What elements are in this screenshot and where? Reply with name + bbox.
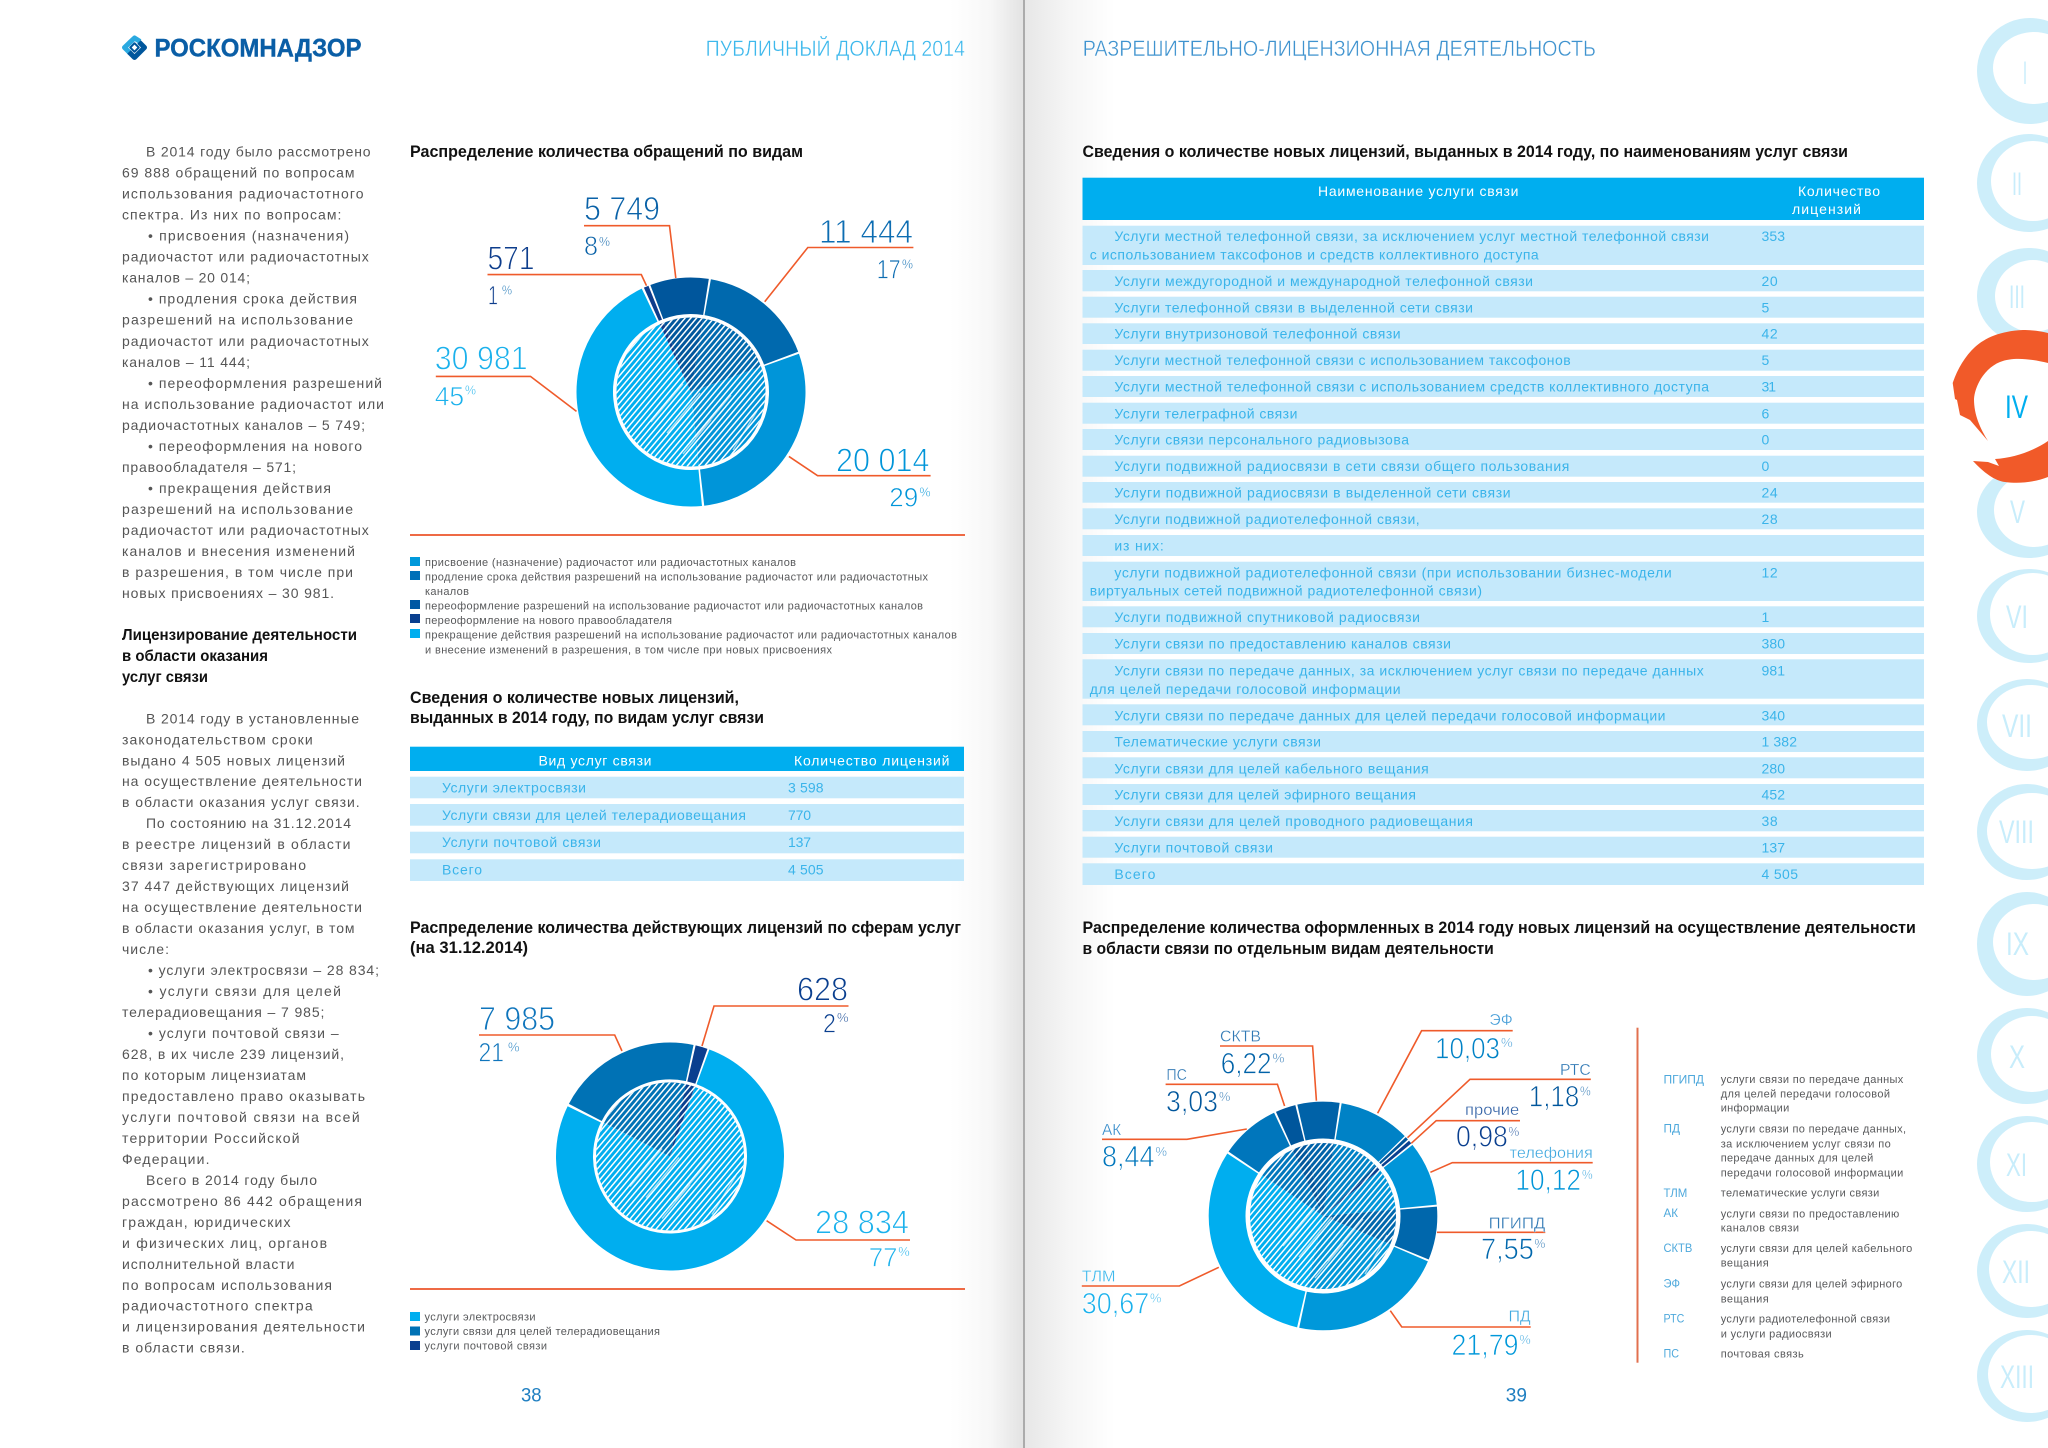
- table: new licences by service name: виртуальных сетей подвижной радиотелефонной связи): [1090, 583, 1482, 599]
- text block: left column, licensing: радиочастотного спектра: [122, 1298, 313, 1314]
- table: new licences by service name: Услуги связи персонального радиовызова: [1114, 432, 1409, 448]
- callout: АК: АК: [1102, 1122, 1122, 1139]
- table: new licences by service name: Всего: [1114, 866, 1156, 882]
- table: new licences by type of service: 4 505: [788, 862, 824, 878]
- callout: 11 444: 11 444: [819, 213, 913, 250]
- table: new licences by type of service: 137: [788, 834, 811, 850]
- text block: left column, licensing: 37 447 действующих лицензий: [122, 878, 349, 894]
- text block: left column, radio frequency requests: новых присвоениях – 30 981.: [122, 585, 334, 601]
- table: new licences by service name: Услуги телефонной связи в выделенной сети связи: [1114, 299, 1473, 315]
- callout: прочие: прочие: [1465, 1102, 1519, 1119]
- callout: 11 444: 17: [877, 255, 901, 285]
- table: new licences by service name: Телематические услуги связи: [1114, 734, 1321, 750]
- table: new licences by service name: 452: [1762, 787, 1785, 803]
- table: new licences by service name: Услуги связи для целей проводного радиовещания: [1114, 813, 1473, 829]
- text block: left column, licensing: в области оказания услуг, в том: [122, 920, 354, 936]
- callout: 571: 1: [488, 281, 498, 311]
- legend: abbreviations glossary: [1664, 1072, 1912, 1360]
- callout: 20 014: [789, 441, 931, 512]
- heading: active licences by sphere: Распределение количества действующих лицензий по сферам услуг: [410, 919, 961, 937]
- text block: left column, radio frequency requests: использования радиочастотного: [122, 186, 364, 202]
- callout: прочие: [1411, 1102, 1520, 1154]
- legend: abbreviations glossary: ПГИПД: [1664, 1072, 1704, 1086]
- table: new licences by type of service: Услуги связи для целей телерадиовещания: [442, 807, 746, 823]
- text block: left column, licensing: связи зарегистрировано: [122, 857, 306, 873]
- page number 39: 39: [1506, 1386, 1527, 1407]
- text block: left column, licensing: в области связи.: [122, 1340, 245, 1356]
- ring I: [1977, 18, 2048, 124]
- callout: 30 981: [435, 340, 576, 411]
- heading: licensing in communications: [122, 627, 357, 686]
- callout: ТЛМ: [1082, 1267, 1219, 1320]
- legend: abbreviations glossary: телематические услуги связи: [1721, 1188, 1879, 1200]
- ring VI: [1977, 569, 2048, 663]
- legend: abbreviations glossary: РТС: [1664, 1312, 1685, 1326]
- page number 38: 38: [521, 1386, 542, 1407]
- ring VII: [1977, 679, 2048, 771]
- icon: logo diamond: [124, 38, 144, 58]
- legend: active licences: услуги почтовой связи: [424, 1341, 547, 1353]
- text block: left column, licensing: телерадиовещания – 7 985;: [122, 1004, 324, 1020]
- donut chart: requests by type: [435, 190, 931, 519]
- callout: ПД: 21,79: [1452, 1329, 1518, 1362]
- callout: 628: %: [837, 1010, 849, 1025]
- table: new licences by type of service: 3 598: [788, 780, 824, 796]
- legend: requests by type: каналов: [425, 586, 469, 598]
- callout: 30 981: 45: [435, 381, 464, 411]
- callout: ТЛМ: ТЛМ: [1082, 1269, 1116, 1286]
- table: new licences by service name: 981: [1762, 662, 1785, 678]
- text block: left column, licensing: в реестре лицензий в области: [122, 836, 350, 852]
- table: new licences by service name: 24: [1762, 484, 1778, 500]
- table: new licences by service name: 0: [1762, 458, 1770, 474]
- table: new licences by service name: Услуги подвижной радиосвязи в сети связи общего пользования: [1114, 458, 1569, 474]
- callout: ПС: %: [1219, 1089, 1231, 1104]
- text block: left column, licensing: территории Российской: [122, 1130, 300, 1146]
- table: new licences by service name: Количество: [1798, 183, 1880, 199]
- callout: 28 834: 77: [869, 1243, 898, 1273]
- callout: СКТВ: 6,22: [1221, 1047, 1272, 1080]
- donut 2 hatched centre: [596, 1082, 744, 1230]
- heading: active licences by sphere: [410, 919, 961, 957]
- callout: РТС: [1408, 1062, 1591, 1138]
- callout: ПС: 3,03: [1166, 1086, 1218, 1119]
- table: new licences by type of service: Вид услуг связи: [538, 753, 652, 769]
- text block: left column, radio frequency requests: 69 888 обращений по вопросам: [122, 164, 354, 180]
- text block: left column, radio frequency requests: правообладателя – 571;: [122, 459, 296, 475]
- donut 1 hatched centre: [616, 318, 766, 466]
- text block: left column, radio frequency requests: каналов – 11 444;: [122, 354, 250, 370]
- text block: left column, licensing: граждан, юридических: [122, 1214, 290, 1230]
- heading: new licences by service name: Сведения о количестве новых лицензий, выданных в 2014 году, по наименованиям услуг связи: [1082, 143, 1848, 161]
- callout: АК: %: [1156, 1144, 1167, 1159]
- table: new licences by service name: 31: [1762, 379, 1776, 395]
- ring III: III: [2009, 279, 2025, 315]
- legend: abbreviations glossary: ЭФ: [1664, 1276, 1680, 1290]
- table: new licences by service name: Услуги связи для целей кабельного вещания: [1114, 760, 1429, 776]
- callout: телефония: телефония: [1510, 1145, 1593, 1162]
- table: new licences by service name: 4 505: [1762, 866, 1798, 882]
- callout: РТС: %: [1580, 1084, 1591, 1098]
- callout: РТС: РТС: [1560, 1062, 1591, 1079]
- ring VIII: VIII: [1999, 814, 2034, 850]
- callout: ПД: ПД: [1508, 1309, 1531, 1326]
- heading: new licences by activity: [1082, 919, 1916, 958]
- legend: requests by type: присвоение (назначение) радиочастот или радиочастотных каналов: [425, 557, 796, 569]
- legend: abbreviations glossary: для целей передачи голосовой: [1721, 1088, 1890, 1100]
- callout: ЭФ: %: [1501, 1035, 1513, 1050]
- legend: abbreviations glossary: вещания: [1721, 1293, 1769, 1305]
- callout: 5 749: 5 749: [584, 190, 660, 227]
- legend: requests by type: и внесение изменений в разрешения, в том числе при новых присвоениях: [425, 644, 832, 656]
- text block: left column, licensing: на осуществление деятельности: [122, 899, 362, 915]
- text block: left column, radio frequency requests: радиочастот или радиочастотных: [122, 333, 369, 349]
- ring X: X: [2009, 1039, 2025, 1075]
- table: new licences by service name: 5: [1762, 352, 1770, 368]
- ring VI: VI: [2006, 599, 2028, 635]
- callout: ЭФ: ЭФ: [1489, 1012, 1513, 1029]
- text block: left column, radio frequency requests: • переоформления на нового: [148, 438, 362, 454]
- text block: left column, radio frequency requests: в разрешения, в том числе при: [122, 564, 353, 580]
- header: report title: ПУБЛИЧНЫЙ ДОКЛАД 2014: [706, 36, 965, 61]
- callout: 7 985: 7 985: [479, 1000, 555, 1037]
- legend: abbreviations glossary: ПС: [1664, 1346, 1679, 1360]
- heading: new licences by type: выданных в 2014 году, по видам услуг связи: [410, 709, 764, 727]
- callout: 628: [702, 971, 849, 1046]
- text block: left column, licensing: и лицензирования деятельности: [122, 1319, 365, 1335]
- text block: left column, radio frequency requests: каналов – 20 014;: [122, 270, 250, 286]
- text block: left column, licensing: • услуги почтовой связи –: [148, 1025, 339, 1041]
- text block: left column, licensing: • услуги электросвязи – 28 834;: [148, 962, 379, 978]
- table: new licences by service name: 1: [1762, 609, 1770, 625]
- callout: ПД: %: [1520, 1332, 1531, 1347]
- table: new licences by service name: 20: [1762, 273, 1778, 289]
- callout: 628: 2: [823, 1008, 836, 1038]
- text block: left column, radio frequency requests: В 2014 году было рассмотрено: [146, 144, 371, 160]
- callout: 7 985: 21: [478, 1038, 504, 1068]
- table: new licences by service name: для целей передачи голосовой информации: [1090, 681, 1401, 697]
- callout: 30 981: %: [465, 383, 476, 398]
- table: new licences by service name: Услуги почтовой связи: [1114, 839, 1273, 855]
- text block: left column, radio frequency requests: радиочастот или радиочастотных: [122, 522, 369, 538]
- donut chart: new licences by activity: [1082, 1012, 1593, 1362]
- table: new licences by service name: Услуги подвижной радиосвязи в выделенной сети связи: [1114, 484, 1511, 500]
- legend: abbreviations glossary: услуги радиотелефонной связи: [1721, 1313, 1890, 1325]
- donut 3 hatched centre: [1250, 1143, 1396, 1289]
- callout: ЭФ: 10,03: [1435, 1032, 1500, 1065]
- donut 3 outer ring: [1187, 1080, 1459, 1352]
- legend: abbreviations glossary: за исключением услуг связи по: [1721, 1138, 1891, 1150]
- callout: 20 014: 20 014: [836, 441, 930, 478]
- callout: ПГИПД: [1437, 1215, 1546, 1266]
- table: new licences by service name: 137: [1762, 839, 1785, 855]
- table: new licences by service name: 6: [1762, 405, 1770, 421]
- callout: ТЛМ: 30,67: [1082, 1287, 1149, 1320]
- table: new licences by service name: Услуги связи по передаче данных, за исключением услуг связи по передаче данных: [1114, 662, 1704, 678]
- legend: abbreviations glossary: АК: [1664, 1206, 1678, 1220]
- text block: left column, radio frequency requests: • присвоения (назначения): [148, 228, 349, 244]
- legend: abbreviations glossary: и услуги радиосвязи: [1721, 1328, 1832, 1340]
- callout: 5 749: 8: [584, 231, 598, 261]
- ring VII: VII: [2002, 708, 2032, 744]
- table: new licences by service name: Услуги подвижной спутниковой радиосвязи: [1114, 609, 1420, 625]
- ring X: [1977, 1008, 2048, 1104]
- text block: left column, licensing: по которым лицензиатам: [122, 1067, 306, 1083]
- table: new licences by type of service: Услуги электросвязи: [442, 780, 586, 796]
- text block: left column, licensing: в области оказания услуг связи.: [122, 794, 360, 810]
- legend: abbreviations glossary: услуги связи по передаче данных: [1721, 1074, 1904, 1086]
- table: new licences by service name: Услуги телеграфной связи: [1114, 405, 1297, 421]
- table: new licences by service name: 28: [1762, 511, 1778, 527]
- callout: ПГИПД: 7,55: [1481, 1233, 1534, 1266]
- table: new licences by type of service: Услуги почтовой связи: [442, 834, 601, 850]
- text block: left column, radio frequency requests: разрешений на использование: [122, 501, 353, 517]
- text block: left column, licensing: 628, в их числе 239 лицензий,: [122, 1046, 344, 1062]
- ring XII: XII: [2002, 1254, 2030, 1290]
- heading: new licences by type: Сведения о количестве новых лицензий,: [410, 689, 739, 707]
- table: new licences by service name: Услуги местной телефонной связи, за исключением услуг местной телефонной связи: [1114, 228, 1709, 244]
- legend: active licences: [410, 1312, 660, 1353]
- legend: requests by type: продление срока действия разрешений на использование радиочастот или радиочастотных: [425, 572, 928, 584]
- legend: requests by type: [410, 557, 957, 656]
- callout: 11 444: %: [902, 257, 913, 272]
- callout: 28 834: [767, 1203, 910, 1273]
- header: section title: РАЗРЕШИТЕЛЬНО-ЛИЦЕНЗИОННАЯ ДЕЯТЕЛЬНОСТЬ: [1083, 36, 1596, 61]
- legend: abbreviations glossary: вещания: [1721, 1258, 1769, 1270]
- table: new licences by service name: из них:: [1114, 538, 1164, 554]
- callout: 571: [488, 240, 646, 311]
- text block: left column, licensing: по вопросам использования: [122, 1277, 332, 1293]
- text block: left column, licensing: Всего в 2014 году было: [146, 1172, 317, 1188]
- table: new licences by service name: Услуги связи для целей эфирного вещания: [1114, 787, 1416, 803]
- callout: 20 014: %: [920, 484, 931, 499]
- table: new licences by type of service: 770: [788, 807, 811, 823]
- legend: abbreviations glossary: ТЛМ: [1664, 1186, 1687, 1200]
- legend: abbreviations glossary: услуги связи для целей кабельного: [1721, 1243, 1912, 1255]
- heading: licensing in communications: услуг связи: [122, 669, 208, 686]
- legend: requests by type: переоформление на нового правообладателя: [425, 615, 672, 627]
- table: new licences by service name: 5: [1762, 299, 1770, 315]
- callout: ПГИПД: %: [1534, 1236, 1546, 1251]
- text block: left column, licensing: Федерации.: [122, 1151, 210, 1167]
- legend: abbreviations glossary: каналов связи: [1721, 1223, 1799, 1235]
- ring IX: IX: [2006, 926, 2029, 962]
- table: new licences by service name: лицензий: [1792, 201, 1861, 217]
- table: new licences by service name: 353: [1762, 228, 1785, 244]
- legend: abbreviations glossary: почтовая связь: [1721, 1348, 1804, 1360]
- donut chart: active licences: [478, 971, 910, 1285]
- text block: left column, licensing: числе:: [122, 941, 169, 957]
- legend: abbreviations glossary: услуги связи по передаче данных,: [1721, 1124, 1906, 1136]
- table: new licences by service name: 380: [1762, 635, 1785, 651]
- text block: left column, radio frequency requests: • продления срока действия: [148, 291, 357, 307]
- callout: ЭФ: [1378, 1012, 1513, 1113]
- table: new licences by service name: 280: [1762, 760, 1785, 776]
- ring XI: [1977, 1116, 2048, 1212]
- ring IV active: IV: [2005, 389, 2028, 425]
- callout: 5 749: [584, 190, 676, 278]
- table: new licences by service name: Услуги междугородной и международной телефонной связи: [1114, 273, 1533, 289]
- legend: active licences: услуги электросвязи: [424, 1312, 536, 1324]
- callout: 7 985: [478, 1000, 622, 1068]
- callout: телефония: 10,12: [1515, 1164, 1581, 1197]
- table: new licences by service name: 12: [1762, 564, 1778, 580]
- legend: abbreviations glossary: СКТВ: [1664, 1241, 1692, 1255]
- heading: licensing in communications: в области оказания: [122, 648, 268, 665]
- ring XII: [1977, 1224, 2048, 1318]
- text block: left column, licensing: выдано 4 505 новых лицензий: [122, 752, 345, 768]
- callout: РТС: 1,18: [1529, 1081, 1579, 1114]
- heading: new licences by activity: в области связи по отдельным видам деятельности: [1082, 940, 1494, 958]
- ring XI: XI: [2006, 1147, 2027, 1183]
- callout: СКТВ: [1220, 1029, 1316, 1101]
- callout: ПС: ПС: [1166, 1067, 1187, 1084]
- callout: СКТВ: СКТВ: [1220, 1029, 1261, 1046]
- callout: телефония: %: [1582, 1167, 1593, 1182]
- text block: left column, radio frequency requests: на использование радиочастот или: [122, 396, 384, 412]
- header: logo Roskomnadzor: РОСКОМНАДЗОР: [154, 34, 362, 62]
- text block: left column, licensing: [122, 710, 379, 1356]
- text block: left column, licensing: рассмотрено 86 442 обращения: [122, 1193, 362, 1209]
- callout: 628: 628: [797, 971, 848, 1008]
- table: new licences by service name: услуги подвижной радиотелефонной связи (при использовании бизнес-модели: [1114, 564, 1672, 580]
- table: new licences by service name: Услуги внутризоновой телефонной связи: [1114, 326, 1401, 342]
- text block: left column, radio frequency requests: каналов и внесения изменений: [122, 543, 355, 559]
- callout: 571: 571: [488, 240, 534, 277]
- donut 2 outer ring: [541, 1028, 799, 1285]
- ring IV active: [1953, 330, 2048, 483]
- ring XIII: [1977, 1330, 2048, 1422]
- table: new licences by service name: Услуги местной телефонной связи с использованием средств коллективного доступа: [1114, 379, 1709, 395]
- donut 1 outer ring: [564, 265, 818, 519]
- callout: прочие: %: [1508, 1124, 1520, 1139]
- ring V: V: [2010, 494, 2025, 530]
- text block: left column, licensing: По состоянию на 31.12.2014: [146, 815, 351, 831]
- text block: left column, licensing: законодательством сроки: [122, 731, 313, 747]
- callout: ПД: [1390, 1309, 1531, 1362]
- text block: left column, licensing: услуги почтовой связи на всей: [122, 1109, 360, 1125]
- table: new licences by service name: 42: [1762, 326, 1778, 342]
- table: new licences by type of service: Количество лицензий: [794, 753, 950, 769]
- text block: left column, radio frequency requests: спектра. Из них по вопросам:: [122, 207, 341, 223]
- text block: left column, licensing: и физических лиц, органов: [122, 1235, 327, 1251]
- text block: left column, radio frequency requests: [122, 144, 384, 601]
- table: new licences by service name: Услуги местной телефонной связи с использованием таксофонов: [1114, 352, 1571, 368]
- text block: left column, radio frequency requests: разрешений на использование: [122, 312, 353, 328]
- table: new licences by service name: с использованием таксофонов и средств коллективного доступа: [1090, 247, 1539, 263]
- table: new licences by service name: 1 382: [1762, 734, 1797, 750]
- table: new licences by service name: 0: [1762, 432, 1770, 448]
- text block: left column, licensing: исполнительной власти: [122, 1256, 294, 1272]
- text block: left column, radio frequency requests: • прекращения действия: [148, 480, 331, 496]
- legend: abbreviations glossary: услуги связи для целей эфирного: [1721, 1278, 1902, 1290]
- table: new licences by service name: 340: [1762, 707, 1785, 723]
- text block: left column, licensing: • услуги связи для целей: [148, 983, 341, 999]
- callout: 7 985: %: [508, 1040, 520, 1055]
- callout: прочие: 0,98: [1456, 1121, 1508, 1154]
- callout: 11 444: [765, 213, 913, 302]
- callout: 5 749: %: [599, 234, 610, 249]
- table: new licences by service name: Услуги связи по передаче данных для целей передачи голосовой информации: [1114, 707, 1666, 723]
- legend: abbreviations glossary: передачи голосовой информации: [1721, 1167, 1903, 1179]
- callout: СКТВ: %: [1272, 1050, 1285, 1066]
- callout: 28 834: 28 834: [815, 1203, 909, 1240]
- ring I: I: [2023, 55, 2027, 91]
- table: new licences by service name: Наименование услуги связи: [1318, 183, 1518, 199]
- table: new licences by service name: [1082, 178, 1924, 885]
- heading: new licences by activity: Распределение количества оформленных в 2014 году новых лицензий на осуществление деятельности: [1082, 919, 1916, 937]
- callout: 28 834: %: [898, 1244, 910, 1259]
- legend: requests by type: переоформление разрешений на использование радиочастот или радиочастотных каналов: [425, 601, 923, 613]
- heading: licensing in communications: Лицензирование деятельности: [122, 627, 357, 644]
- legend: abbreviations glossary: информации: [1721, 1103, 1789, 1115]
- table: new licences by service name: Услуги связи по предоставлению каналов связи: [1114, 635, 1451, 651]
- heading: active licences by sphere: (на 31.12.2014): [410, 939, 528, 957]
- text block: left column, licensing: на осуществление деятельности: [122, 773, 362, 789]
- legend: abbreviations glossary: ПД: [1664, 1122, 1680, 1136]
- callout: 30 981: 30 981: [435, 340, 528, 377]
- text block: left column, radio frequency requests: радиочастот или радиочастотных: [122, 249, 369, 265]
- ring II: II: [2012, 166, 2022, 202]
- ring V: [1977, 466, 2048, 558]
- ring XIII: XIII: [2000, 1359, 2034, 1395]
- text block: left column, licensing: предоставлено право оказывать: [122, 1088, 365, 1104]
- table: new licences by service name: 38: [1762, 813, 1778, 829]
- callout: АК: [1102, 1122, 1247, 1174]
- table: new licences by type of service: [410, 747, 964, 881]
- text block: left column, radio frequency requests: • переоформления разрешений: [148, 375, 382, 391]
- callout: АК: 8,44: [1102, 1141, 1154, 1174]
- legend: abbreviations glossary: передаче данных для целей: [1721, 1153, 1873, 1165]
- callout: телефония: [1430, 1145, 1593, 1197]
- heading: new licences by type: [410, 689, 764, 727]
- text block: left column, radio frequency requests: радиочастотных каналов – 5 749;: [122, 417, 365, 433]
- ring II: [1977, 134, 2048, 232]
- ring IX: [1977, 892, 2048, 996]
- callout: 571: %: [502, 283, 512, 298]
- callout: 20 014: 29: [889, 482, 918, 512]
- chapter navigation rings: [1953, 18, 2048, 1422]
- legend: active licences: услуги связи для целей телерадиовещания: [424, 1326, 660, 1338]
- callout: ПГИПД: ПГИПД: [1489, 1215, 1545, 1232]
- callout: ТЛМ: %: [1150, 1290, 1162, 1306]
- legend: requests by type: прекращение действия разрешений на использование радиочастот или радиочастотных каналов: [425, 630, 957, 642]
- text block: left column, licensing: В 2014 году в установленные: [146, 710, 359, 726]
- table: new licences by type of service: Всего: [442, 862, 482, 878]
- heading: distribution of requests by type: Распределение количества обращений по видам: [410, 143, 803, 161]
- callout: ПС: [1166, 1067, 1285, 1119]
- table: new licences by service name: Услуги подвижной радиотелефонной связи,: [1114, 511, 1420, 527]
- legend: abbreviations glossary: услуги связи по предоставлению: [1721, 1208, 1899, 1220]
- ring VIII: [1977, 784, 2048, 880]
- ring III: [1977, 248, 2048, 344]
